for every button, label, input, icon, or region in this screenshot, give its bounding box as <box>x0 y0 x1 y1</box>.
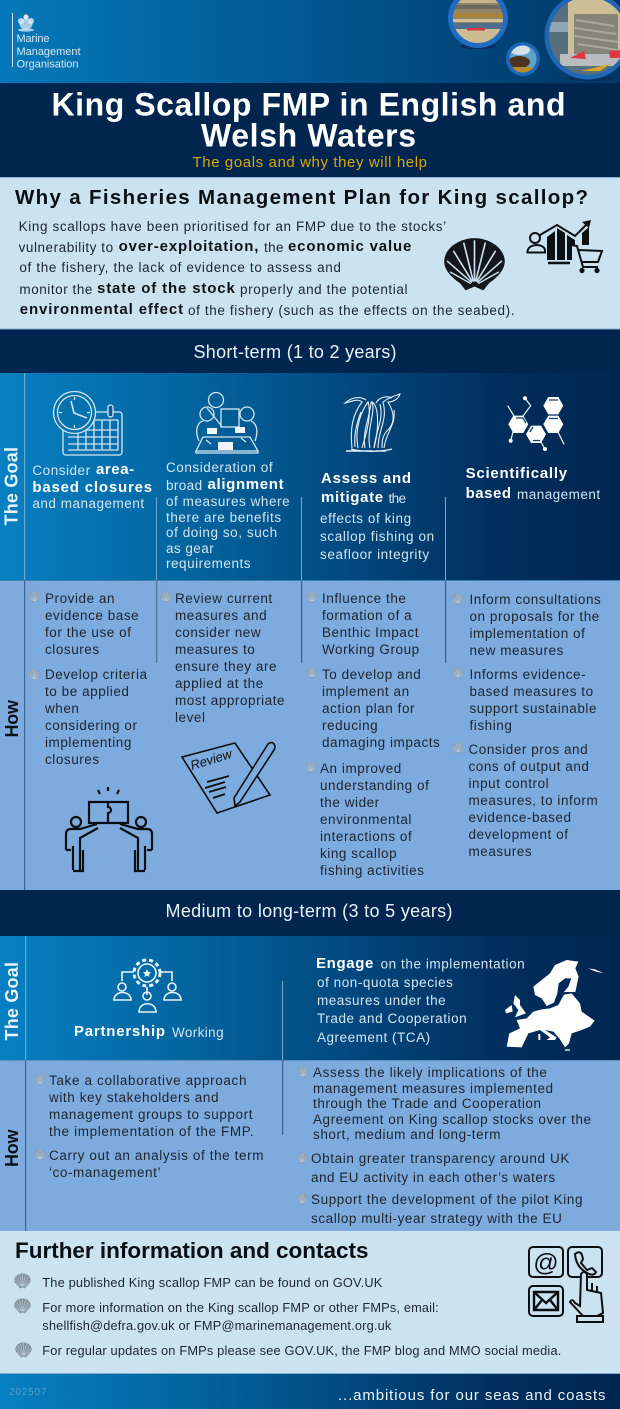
goal: engage on TCA <box>316 955 604 1051</box>
goal: engage on TCA: Trade and Cooperation <box>317 1011 468 1026</box>
list: TCA how: through the Trade and Cooperation <box>313 1096 542 1111</box>
icon: review document and pen: Review <box>188 746 235 773</box>
panel: further information and contacts <box>0 1231 620 1373</box>
list: benthic how: interactions of <box>320 829 412 844</box>
icon: clock and calendar <box>54 392 122 455</box>
photo: scallop dredge <box>544 0 620 81</box>
goal: broad alignment: of doing so, such <box>166 525 278 540</box>
header band <box>0 0 620 83</box>
list: closures how: closures <box>45 752 100 767</box>
text block: why explanation: state of the stock <box>97 280 236 297</box>
icon: review document and pen <box>182 742 275 813</box>
list: TCA how: Obtain greater transparency around UK <box>311 1151 570 1166</box>
goal: scientifically based: based <box>466 485 512 502</box>
label: how: How <box>2 699 22 738</box>
goal: broad alignment: requirements <box>166 556 251 571</box>
list: TCA how: short, medium and long-term <box>313 1127 501 1142</box>
list: science how: on proposals for the <box>470 609 600 624</box>
goal: assess and mitigate <box>320 394 435 562</box>
text block: why explanation: of the fishery (such as the effects on the seabed). <box>188 303 515 318</box>
list: science how: based measures to <box>470 684 594 699</box>
list: contacts: The published King scallop FMP can be found on GOV.UK <box>42 1275 383 1290</box>
icon: partnership gear and people <box>114 960 181 1012</box>
list: closures how: Provide an <box>45 591 115 606</box>
goal: scientifically based: Scientifically <box>466 465 568 482</box>
list: science how: cons of output and <box>468 759 590 774</box>
list: alignment how: level <box>175 710 206 725</box>
footer band <box>0 1373 620 1409</box>
goal: engage on TCA: on the implementation <box>381 956 526 972</box>
text block: why explanation: economic value <box>288 238 412 255</box>
list: partnership how: Carry out an analysis of the term <box>49 1148 264 1163</box>
list: benthic how: damaging impacts <box>322 735 440 750</box>
text block: why explanation: of the fishery, the lack of evidence to assess and <box>19 260 341 275</box>
list: TCA how: scallop multi-year strategy with the EU <box>311 1211 562 1226</box>
icon: chart and shopping cart <box>527 220 602 273</box>
icon: seaweed <box>345 394 400 451</box>
goal: area-based closures: and management <box>32 496 145 511</box>
list: benthic how: formation of a <box>322 608 412 623</box>
goal: broad alignment <box>166 392 290 571</box>
goal: assess and mitigate: effects of king <box>320 511 412 526</box>
title band <box>0 83 620 177</box>
list: science how: Consider pros and <box>468 742 588 757</box>
band: short-term heading <box>0 330 620 373</box>
label: the goal: The Goal <box>2 447 22 526</box>
goal: engage on TCA: Agreement (TCA) <box>317 1030 431 1045</box>
list: science how: input control <box>468 776 549 791</box>
list: closures how <box>29 591 148 767</box>
list: TCA how: Assess the likely implications of the <box>313 1065 547 1080</box>
list: TCA how: and EU activity in each other’s waters <box>311 1170 556 1185</box>
text block: why explanation: properly and the potential <box>240 282 408 297</box>
goal: area-based closures: Consider <box>32 463 91 478</box>
heading: why a fisheries management plan: Why a Fisheries Management Plan for King scallop? <box>15 186 588 209</box>
goal: scientifically based: management <box>517 487 601 502</box>
list: closures how: evidence base <box>45 608 139 623</box>
title <box>52 86 566 154</box>
goal: partnership working: Partnership <box>74 1023 166 1040</box>
list: closures how: when <box>44 701 79 716</box>
goal: assess and mitigate: seafloor integrity <box>320 547 430 562</box>
goal: broad alignment: as gear <box>166 541 215 556</box>
list: closures how: to be applied <box>45 684 129 699</box>
list: alignment how <box>160 591 285 725</box>
panel: short-term goals row <box>0 373 620 580</box>
goal: assess and mitigate: mitigate <box>321 489 384 506</box>
goal: assess and mitigate: the <box>388 491 407 506</box>
list: alignment how: measures and <box>175 608 267 623</box>
logo: Marine Management Organisation: Management <box>16 46 80 58</box>
panel: medium-term goals row <box>0 936 620 1060</box>
list: alignment how: Review current <box>175 591 273 606</box>
list: science how: Informs evidence- <box>470 667 586 682</box>
list: science how: development of <box>468 827 569 842</box>
label: how: How <box>2 1129 22 1167</box>
icon: scallop shell <box>444 238 505 290</box>
list: partnership how <box>34 1073 264 1180</box>
list: science how: measures <box>468 844 532 859</box>
goal: engage on TCA: measures under the <box>317 993 447 1008</box>
list: benthic how: To develop and <box>322 667 421 682</box>
goal: broad alignment: of measures where <box>166 494 290 509</box>
goal: area-based closures: based closures <box>32 479 153 496</box>
text block: why explanation: vulnerability to <box>19 240 114 255</box>
band: short-term heading: Short-term (1 to 2 years) <box>194 342 396 362</box>
text block: why explanation: the <box>264 240 284 255</box>
photo circles <box>448 0 620 81</box>
list: benthic how: An improved <box>320 761 402 776</box>
list: benthic how: action plan for <box>322 701 415 716</box>
goal: broad alignment: alignment <box>208 476 284 493</box>
list: partnership how: management groups to support <box>49 1107 253 1122</box>
panel: why an FMP <box>0 177 620 330</box>
band: medium to long-term heading: Medium to long-term (3 to 5 years) <box>166 901 452 921</box>
subtitle: The goals and why they will help <box>192 154 427 171</box>
list: benthic how: implement an <box>322 684 410 699</box>
goal: partnership working <box>74 960 224 1040</box>
band: medium to long-term heading <box>0 890 620 936</box>
list: partnership how: ‘co-management’ <box>49 1165 161 1180</box>
list: TCA how <box>296 1065 592 1226</box>
list: benthic how: king scallop <box>320 846 397 861</box>
goal: broad alignment: Consideration of <box>166 460 274 475</box>
list: contacts: For regular updates on FMPs please see GOV.UK, the FMP blog and MMO social media. <box>42 1343 561 1358</box>
goal: area-based closures <box>32 392 153 511</box>
list: contacts: For more information on the King scallop FMP or other FMPs, email: <box>42 1300 439 1315</box>
text block: why explanation: King scallops have been prioritised for an FMP due to the stocks’ <box>19 219 447 234</box>
text block: why explanation: monitor the <box>19 282 93 297</box>
list: alignment how: consider new <box>175 625 261 640</box>
list: benthic how: understanding of <box>320 778 429 793</box>
list: science how: implementation of <box>470 626 585 641</box>
list: TCA how: management measures implemented <box>313 1081 554 1096</box>
icon: two people joining puzzle <box>66 787 152 871</box>
list: benthic how: Benthic Impact <box>322 625 419 640</box>
list: contacts: shellfish@defra.gov.uk or FMP@marinemanagement.org.uk <box>42 1318 392 1333</box>
list: benthic how: reducing <box>322 718 378 733</box>
goal: engage on TCA: of non-quota species <box>317 975 454 990</box>
list: benthic how <box>305 591 440 878</box>
text block: why explanation: over-exploitation, <box>119 238 259 255</box>
icon: contact methods: @ <box>533 1249 559 1277</box>
goal: assess and mitigate: Assess and <box>321 470 412 487</box>
heading: further information: Further information and contacts <box>15 1238 368 1263</box>
list: science how: measures, to inform <box>468 793 598 808</box>
photo: harbour <box>448 0 508 49</box>
list: closures how: for the use of <box>45 625 132 640</box>
list: alignment how: ensure they are <box>175 659 277 674</box>
goal: area-based closures: area- <box>96 461 135 478</box>
list: science how: evidence-based <box>468 810 572 825</box>
list: alignment how: measures to <box>175 642 255 657</box>
list: benthic how: environmental <box>320 812 412 827</box>
list: partnership how: Take a collaborative approach <box>49 1073 247 1088</box>
icon: molecule <box>508 396 564 451</box>
title: Welsh Waters <box>201 118 416 154</box>
goal: broad alignment: there are benefits <box>166 510 282 525</box>
list: closures how: Develop criteria <box>45 667 148 682</box>
logo: Marine Management Organisation <box>12 13 80 70</box>
goal: scientifically based <box>466 396 601 502</box>
list: alignment how: most appropriate <box>175 693 285 708</box>
list: closures how: closures <box>45 642 100 657</box>
text block: why explanation <box>19 219 515 318</box>
list: contacts <box>14 1273 561 1358</box>
photo: seabed <box>506 42 540 76</box>
panel: medium-term how row <box>0 1060 620 1231</box>
list: science how: Inform consultations <box>470 592 601 607</box>
strapline: ...ambitious for our seas and coasts <box>338 1387 606 1404</box>
list: science how: new measures <box>470 643 564 658</box>
list: benthic how: Influence the <box>322 591 406 606</box>
icon: contact methods <box>529 1247 603 1322</box>
footer code: 202507 <box>9 1387 47 1398</box>
list: partnership how: with key stakeholders and <box>48 1090 219 1105</box>
list: closures how: considering or <box>45 718 138 733</box>
goal: engage on TCA: Engage <box>316 955 374 972</box>
logo: Marine Management Organisation: Organisation <box>16 58 78 70</box>
label: the goal: The Goal <box>2 962 22 1040</box>
list: TCA how: Agreement on King scallop stocks over the <box>313 1112 592 1127</box>
goal: broad alignment: broad <box>166 478 203 493</box>
goal: partnership working: Working <box>172 1025 224 1040</box>
icon: people meeting around table <box>196 392 258 453</box>
text block: why explanation: environmental effect <box>20 301 184 318</box>
title: King Scallop FMP in English and <box>52 86 566 122</box>
logo: Marine Management Organisation: Marine <box>16 33 50 45</box>
list: TCA how: Support the development of the pilot King <box>311 1192 583 1207</box>
list: partnership how: the implementation of the FMP. <box>49 1124 254 1139</box>
list: benthic how: Working Group <box>322 642 420 657</box>
list: science how <box>452 592 601 859</box>
goal: assess and mitigate: scallop fishing on <box>320 529 435 544</box>
icon: map of Europe <box>505 960 604 1051</box>
list: benthic how: the wider <box>320 795 380 810</box>
list: closures how: implementing <box>45 735 132 750</box>
list: alignment how: applied at the <box>175 676 264 691</box>
panel: short-term how row <box>0 580 620 890</box>
list: science how: support sustainable <box>470 701 597 716</box>
list: benthic how: fishing activities <box>320 863 424 878</box>
icon: royal crest <box>18 14 34 32</box>
list: science how: fishing <box>470 718 512 733</box>
